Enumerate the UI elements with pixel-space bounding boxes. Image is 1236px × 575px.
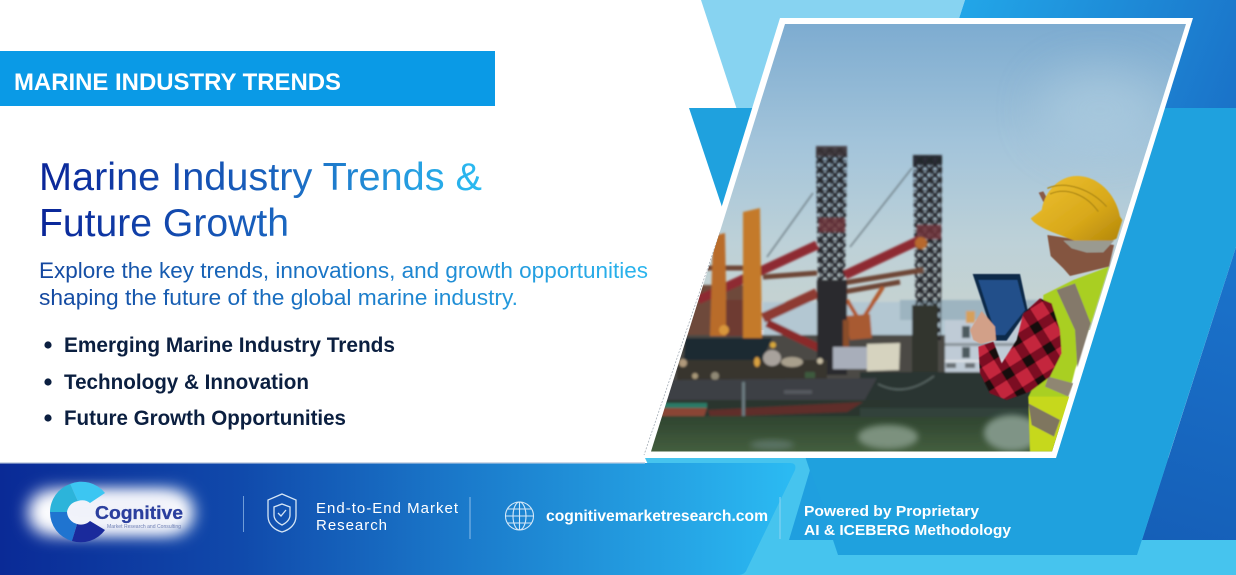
icon: globe (506, 502, 534, 530)
heading: Future Growth (39, 202, 289, 245)
logo C mark (50, 482, 105, 542)
tablet (973, 274, 1028, 341)
lower red hull (708, 402, 863, 417)
subheading text block: Explore the key trends, innovations, and growth opportunities (39, 258, 648, 283)
bullet list (44, 333, 395, 430)
logo: Cognitive: Market Research and Consulting (107, 524, 181, 530)
text: website: cognitivemarketresearch.com (546, 508, 768, 525)
text: end-to-end market research: End-to-End Market (316, 500, 459, 517)
subheading text block: shaping the future of the global marine industry. (39, 285, 518, 310)
cables (767, 168, 912, 257)
panel: top title banner (0, 51, 495, 106)
text: powered by methodology (804, 503, 1012, 539)
text: powered by methodology: Powered by Proprietary (804, 503, 980, 520)
background shape: dark blue lower right block (1142, 247, 1236, 540)
bullet list: Technology & Innovation (64, 370, 309, 394)
water (640, 416, 1060, 454)
logo: Cognitive: Cognitive (95, 502, 183, 523)
accent: small blue wedge by footer (789, 470, 836, 540)
background shape: light blue top wedge (701, 0, 965, 200)
background shape: top right blue block (930, 0, 1236, 108)
bullet list: Future Growth Opportunities (64, 406, 346, 430)
ship deck clutter (677, 360, 827, 380)
orange columns (743, 208, 762, 338)
logo: Cognitive (28, 482, 194, 542)
head (1047, 235, 1114, 276)
far horizon and gaps (760, 300, 946, 337)
icon: shield with check (268, 494, 296, 532)
subheading text block (39, 258, 648, 310)
secondary brown beams (700, 268, 923, 292)
red booms (698, 240, 920, 300)
heading: Marine Industry Trends & (39, 156, 482, 199)
white deck buildings (833, 347, 868, 369)
engineer figure (970, 176, 1122, 452)
photo white frame (644, 18, 1193, 458)
orange crane arm (845, 285, 886, 318)
photo: engineer viewing port cranes (640, 20, 1200, 454)
ship superstructure (683, 338, 772, 361)
heading (39, 156, 482, 245)
hard hat (1031, 176, 1122, 253)
hand (970, 311, 996, 344)
banner title: MARINE INDUSTRY TRENDS (14, 69, 341, 96)
right dock (860, 372, 1060, 408)
raised finger behind helmet (1039, 191, 1048, 202)
ship hull (664, 378, 877, 403)
text: powered by methodology: AI & ICEBERG Methodology (804, 522, 1012, 539)
vest (1028, 267, 1109, 452)
plaid shirt (978, 298, 1062, 400)
bullet list: Emerging Marine Industry Trends (64, 333, 395, 357)
text: end-to-end market research (316, 500, 459, 534)
small boat (662, 406, 708, 418)
text: end-to-end market research: Research (316, 517, 387, 534)
background shape: light blue lower band (645, 458, 1236, 575)
panel: footer bar (0, 462, 795, 575)
background shape: mid blue block (689, 108, 1236, 555)
dark tower bases (817, 280, 847, 375)
towers (816, 148, 847, 290)
